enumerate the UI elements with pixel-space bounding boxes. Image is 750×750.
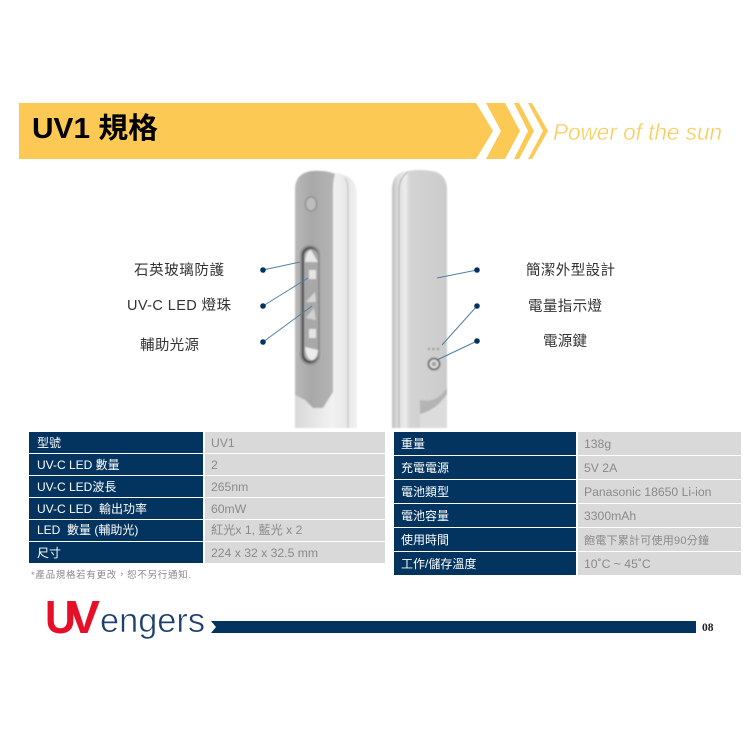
logo: engers — [100, 602, 205, 640]
spec table: left: UV-C LED 輸出功率 — [37, 501, 147, 516]
page number: 08 — [702, 622, 714, 634]
spec table: left: UV1 — [211, 436, 235, 450]
device front view — [295, 171, 357, 428]
battery indicator dots — [428, 348, 439, 350]
spec table: left — [29, 432, 385, 563]
spec table: left: 265nm — [211, 480, 248, 494]
callouts: right — [437, 267, 480, 360]
front button — [306, 197, 316, 211]
spec table: left: 尺寸 — [37, 546, 61, 560]
spec table: left: LED 數量 (輔助光) — [37, 523, 138, 537]
spec table: left: 60mW — [211, 502, 247, 516]
power button — [428, 358, 440, 370]
callouts: left — [260, 262, 312, 345]
banner — [19, 103, 548, 159]
spec table: right: 重量 — [401, 437, 425, 451]
spec table: right: 工作/儲存溫度 — [401, 556, 476, 571]
spec table: left: 224 x 32 x 32.5 mm — [211, 546, 318, 560]
slogan: Power of the sun — [553, 119, 722, 145]
spec table: right: 5V 2A — [584, 461, 618, 475]
spec table: left: UV-C LED波長 — [37, 480, 116, 494]
spec table: right — [394, 432, 741, 575]
spec table: right: Panasonic 18650 Li-ion — [584, 485, 711, 499]
logo: U — [45, 591, 76, 643]
footer ribbon — [211, 621, 696, 633]
device back view — [392, 170, 447, 428]
label: power key: 電源鍵 — [543, 333, 587, 350]
spec table: right: 138g — [584, 437, 611, 451]
spec table: right: 10˚C ~ 45˚C — [584, 557, 651, 571]
label: UV-C LED: UV-C LED 燈珠 — [127, 297, 232, 314]
LED window — [300, 245, 320, 365]
spec table: left: UV-C LED 數量 — [37, 458, 120, 472]
spec table: right: 電池容量 — [401, 508, 449, 523]
footnote: *產品規格若有更改，恕不另行通知. — [31, 569, 191, 581]
label: simple design: 簡潔外型設計 — [526, 262, 615, 279]
spec table: left: 型號 — [37, 436, 61, 450]
spec table: left: 2 — [211, 458, 218, 472]
spec table: right: 充電電源 — [401, 461, 449, 475]
spec table: right: 3300mAh — [584, 509, 636, 523]
label: battery indicator: 電量指示燈 — [528, 298, 602, 315]
spec table: right: 使用時間 — [401, 532, 449, 547]
spec table: right: 飽電下累計可使用90分鐘 — [584, 533, 709, 547]
title: UV1 規格 — [32, 112, 158, 145]
grip panel — [295, 171, 335, 408]
spec table: left: 紅光x 1, 藍光 x 2 — [211, 523, 303, 537]
spec table: right: 電池類型 — [401, 485, 449, 499]
logo: V — [68, 591, 100, 643]
logo — [45, 591, 205, 643]
label: quartz glass: 石英玻璃防護 — [134, 262, 224, 279]
label: auxiliary light: 輔助光源 — [140, 337, 200, 354]
